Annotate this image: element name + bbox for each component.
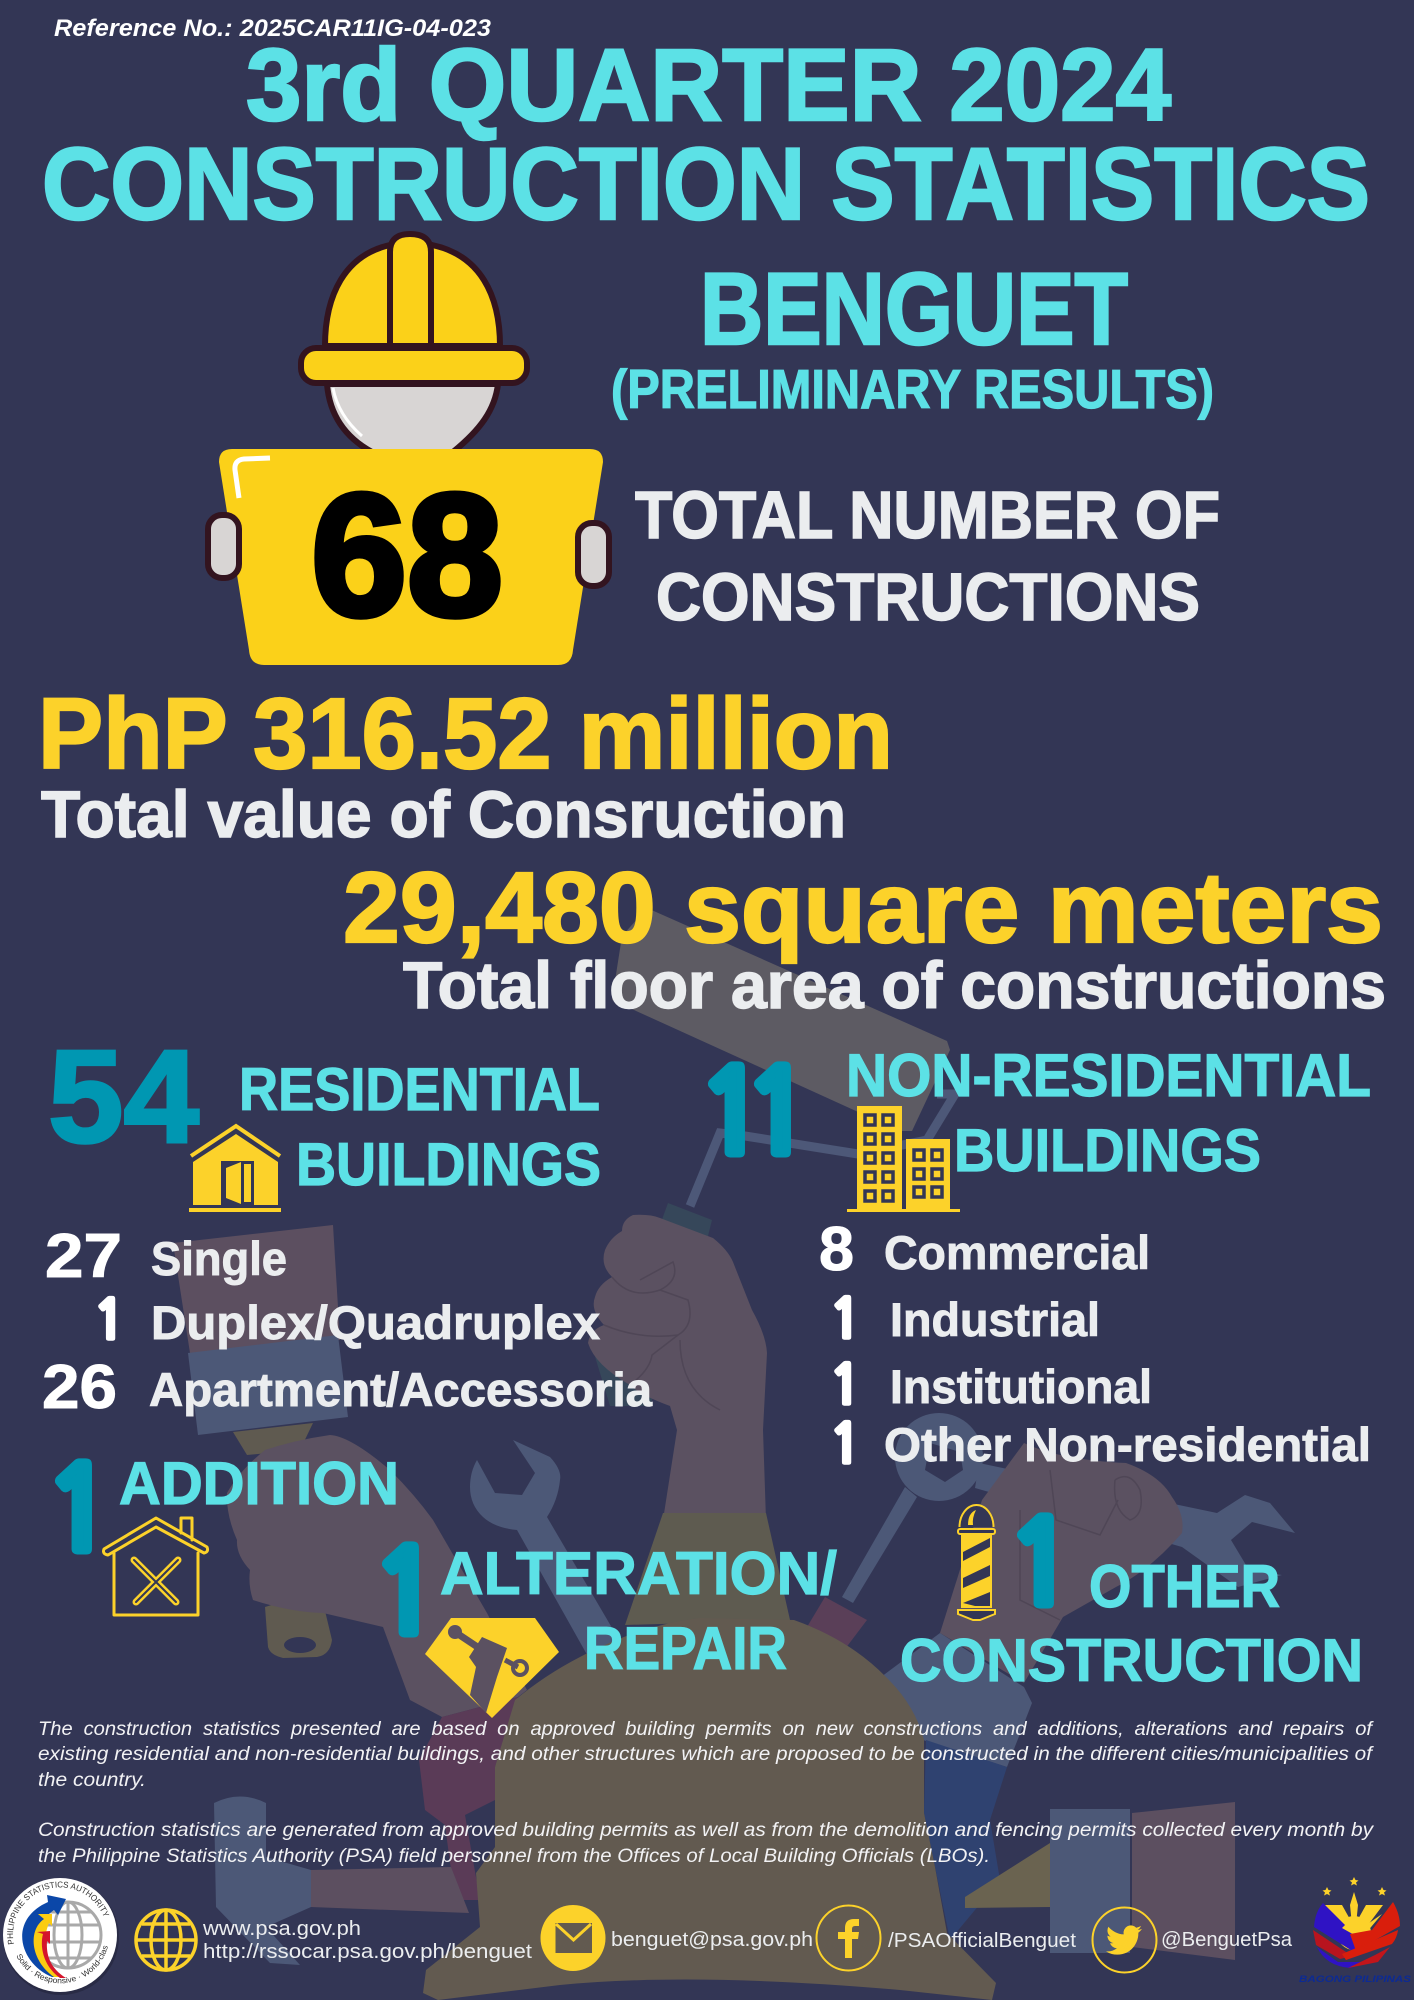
icon: house bbox=[189, 1126, 281, 1212]
icon: globe bbox=[136, 1910, 196, 1970]
text block: notes on the statistics: Construction statistics are generated from approved building permits as well as from the demolition and fencing permits collected every month by bbox=[38, 1820, 1375, 1841]
region heading: BENGUET bbox=[700, 252, 1128, 366]
left fist and arm bbox=[227, 1435, 527, 1717]
panel: alteration and repair: 1 bbox=[371, 1536, 441, 1651]
icon: barber pole bbox=[958, 1505, 995, 1620]
total value stat bbox=[38, 678, 893, 851]
residential breakdown: 1 bbox=[93, 1295, 126, 1348]
helmet brim bbox=[301, 348, 527, 383]
non-residential breakdown: Other Non-residential bbox=[884, 1418, 1371, 1471]
floor area stat: 29,480 square meters bbox=[343, 852, 1383, 964]
residential breakdown: Duplex/Quadruplex bbox=[151, 1296, 600, 1349]
worker head bbox=[327, 384, 498, 452]
floor area stat bbox=[343, 852, 1386, 1022]
paint brush bbox=[173, 1225, 348, 1658]
lower left hammer and brush bbox=[214, 1796, 469, 1965]
panel: non-residential buildings: BUILDINGS bbox=[954, 1117, 1261, 1184]
left sleeve bbox=[419, 1697, 518, 1900]
icon: twitter bbox=[1092, 1908, 1156, 1972]
text block: notes on the statistics: the Philippine Statistics Authority (PSA) field personnel from the Offices of Local Building Officials (LBOs). bbox=[38, 1846, 990, 1867]
panel: other construction: OTHER bbox=[1089, 1553, 1280, 1620]
icon: fist with wrench badge bbox=[425, 1618, 559, 1718]
website links bbox=[202, 1918, 532, 1963]
email address: benguet@psa.gov.ph bbox=[611, 1929, 813, 1951]
central fist bbox=[588, 1215, 767, 1520]
left wrench bbox=[470, 1440, 625, 1660]
title bbox=[42, 28, 1370, 241]
non-residential breakdown: Commercial bbox=[884, 1226, 1150, 1279]
right sleeve bbox=[877, 1633, 1032, 1767]
region heading bbox=[611, 252, 1214, 420]
panel: addition: 1 bbox=[44, 1453, 114, 1568]
logo: Philippine Statistics Authority seal bbox=[3, 1878, 119, 1995]
lower right brush bbox=[965, 1802, 1235, 1960]
total value stat: Total value of Consruction bbox=[41, 777, 846, 851]
panel: other construction: CONSTRUCTION bbox=[900, 1627, 1363, 1694]
panel: addition bbox=[44, 1450, 399, 1615]
panel: residential buildings: 54 bbox=[48, 1023, 199, 1170]
panel: alteration and repair bbox=[371, 1536, 837, 1718]
panel: other construction bbox=[900, 1505, 1363, 1694]
facebook handle: /PSAOfficialBenguet bbox=[888, 1930, 1076, 1952]
non-residential breakdown: Institutional bbox=[890, 1360, 1152, 1413]
residential breakdown: Single bbox=[151, 1232, 287, 1285]
residential breakdown: Apartment/Accessoria bbox=[149, 1363, 653, 1416]
panel: residential buildings: BUILDINGS bbox=[296, 1131, 601, 1198]
non-residential breakdown: 1 bbox=[829, 1360, 862, 1413]
reference number: Reference No.: 2025CAR11IG-04-023 bbox=[54, 15, 492, 42]
helmet dome bbox=[325, 245, 500, 346]
floor area stat: Total floor area of constructions bbox=[403, 948, 1386, 1022]
icon: office buildings bbox=[847, 1106, 960, 1212]
residential breakdown: 27 bbox=[45, 1222, 122, 1291]
title: 3rd QUARTER 2024 bbox=[246, 28, 1171, 142]
total value stat: PhP 316.52 million bbox=[38, 678, 893, 790]
panel: residential buildings: RESIDENTIAL bbox=[239, 1056, 600, 1123]
logo: Bagong Pilipinas bbox=[1299, 1877, 1411, 1984]
paint roller bbox=[593, 908, 955, 1406]
sign board bbox=[219, 449, 603, 665]
panel: non-residential buildings: 11 bbox=[697, 1056, 813, 1171]
residential breakdown bbox=[42, 1222, 653, 1422]
total number label: CONSTRUCTIONS bbox=[656, 560, 1200, 635]
panel: non-residential buildings bbox=[697, 1042, 1371, 1212]
icon: facebook bbox=[816, 1906, 880, 1970]
text block: notes on the statistics: existing residential and non-residential buildings, and other structures which are proposed to be constructed in the different cities/municipalities of bbox=[38, 1744, 1374, 1765]
non-residential breakdown: 8 bbox=[819, 1215, 854, 1284]
helmet ridge bbox=[390, 234, 431, 346]
text block: notes on the statistics: the country. bbox=[38, 1770, 146, 1791]
right tools: ring wrench and screwdriver bbox=[807, 1413, 1295, 1657]
non-residential breakdown: 1 bbox=[829, 1294, 862, 1347]
non-residential breakdown: 1 bbox=[829, 1419, 862, 1472]
region heading: (PRELIMINARY RESULTS) bbox=[611, 358, 1214, 420]
logo: Bagong Pilipinas: BAGONG PILIPINAS bbox=[1299, 1974, 1411, 1984]
total number label bbox=[635, 478, 1220, 635]
icon: house with tools bbox=[104, 1518, 208, 1615]
residential breakdown: 26 bbox=[42, 1353, 117, 1422]
total number label: TOTAL NUMBER OF bbox=[635, 478, 1220, 553]
icon: worker with hard hat holding sign bbox=[208, 234, 609, 665]
non-residential breakdown: Industrial bbox=[890, 1293, 1100, 1346]
panel: other construction: 1 bbox=[1006, 1507, 1076, 1622]
website links: www.psa.gov.ph bbox=[202, 1918, 361, 1940]
non-residential breakdown bbox=[819, 1215, 1371, 1472]
twitter handle: @BenguetPsa bbox=[1161, 1929, 1293, 1951]
icon: email bbox=[540, 1905, 606, 1971]
text block: notes on the statistics bbox=[38, 1719, 1375, 1867]
hard hat with cuff bbox=[423, 1513, 996, 2000]
total number value: 68 bbox=[311, 457, 503, 652]
panel: non-residential buildings: NON-RESIDENTIAL bbox=[846, 1042, 1371, 1109]
left hand bbox=[208, 515, 239, 578]
right fist and arm bbox=[940, 1443, 1183, 1683]
right hand bbox=[578, 523, 609, 586]
text block: notes on the statistics: The construction statistics presented are based on approved building permits on new constructions and additions, alterations and repairs of bbox=[38, 1719, 1374, 1740]
logo: Philippine Statistics Authority seal: Solid · Responsive · World-class bbox=[16, 1946, 108, 1984]
panel: alteration and repair: ALTERATION/ bbox=[440, 1540, 837, 1607]
panel: residential buildings bbox=[48, 1023, 601, 1212]
panel: addition: ADDITION bbox=[119, 1450, 399, 1517]
panel: alteration and repair: REPAIR bbox=[584, 1615, 787, 1682]
background illustration: construction tools and hands bbox=[173, 908, 1295, 2000]
website links: http://rssocar.psa.gov.ph/benguet bbox=[203, 1941, 532, 1963]
logo: Philippine Statistics Authority seal: PHILIPPINE STATISTICS AUTHORITY bbox=[7, 1882, 110, 1944]
